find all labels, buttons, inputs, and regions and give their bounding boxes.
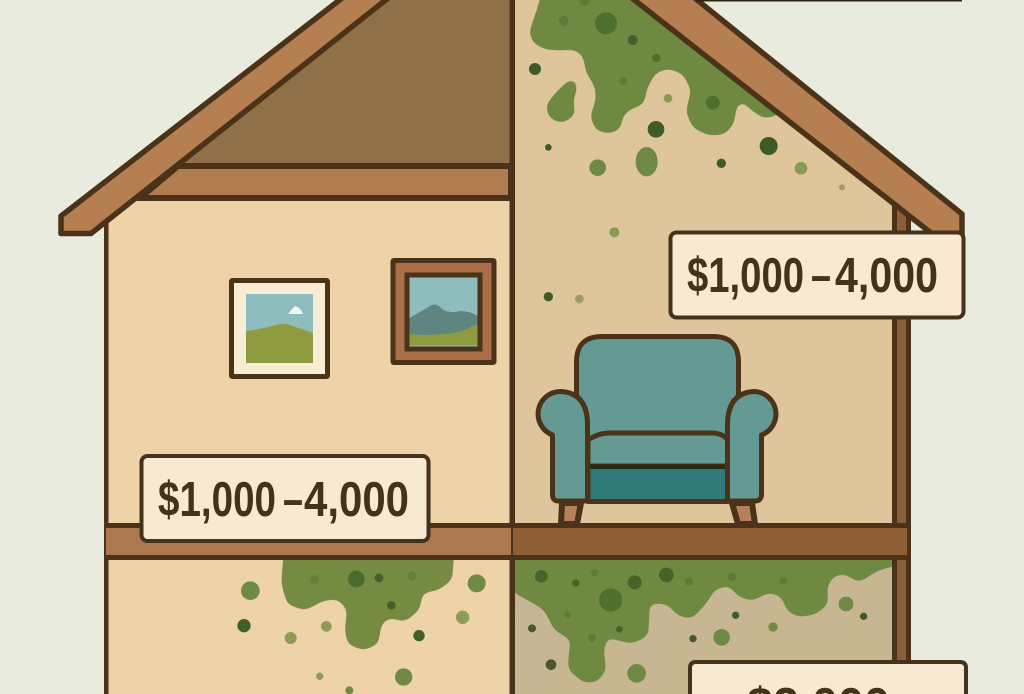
chair seat cushion bbox=[588, 433, 728, 466]
chair leg right bbox=[732, 503, 755, 524]
panel: right upper wall bbox=[513, 0, 895, 525]
price label: right upper: – bbox=[811, 249, 831, 303]
price label: left floor: $1,000 bbox=[158, 473, 276, 527]
panel: left upper wall bbox=[106, 198, 511, 525]
centre divider bbox=[510, 0, 515, 694]
right post bbox=[892, 203, 911, 660]
mold: left basement bbox=[237, 550, 486, 694]
panel: right basement wall bbox=[513, 558, 895, 694]
right roof rafter bbox=[628, 0, 962, 240]
chair leg left bbox=[561, 503, 581, 524]
price label: bottom right bbox=[690, 662, 966, 694]
panel: clean attic bbox=[180, 0, 511, 166]
chair seat shadow line bbox=[589, 464, 727, 469]
chair back bbox=[576, 336, 738, 460]
price label: left floor: – bbox=[283, 473, 303, 527]
panel: left basement wall bbox=[106, 558, 511, 694]
left roof rafter bbox=[61, 0, 392, 234]
price label: right upper bbox=[670, 232, 964, 318]
mold: right basement bbox=[512, 550, 899, 683]
floor beam right bbox=[511, 523, 908, 560]
armchair bbox=[538, 336, 776, 524]
mold: attic bbox=[529, 0, 845, 303]
price label: right upper: 4,000 bbox=[835, 249, 938, 303]
attic tie beam bbox=[140, 166, 511, 198]
price label: left floor bbox=[142, 456, 428, 541]
picture: cream framed landscape bbox=[232, 280, 328, 376]
chair base bbox=[588, 466, 728, 502]
price label: left floor: 4,000 bbox=[304, 473, 409, 527]
chair arm left bbox=[538, 391, 588, 501]
left wall outline bbox=[104, 218, 108, 694]
picture: brown framed mountains bbox=[393, 260, 494, 362]
floor beam left bbox=[106, 523, 511, 560]
price label: right upper: $1,000 bbox=[687, 249, 804, 303]
top label edge bbox=[696, 0, 962, 2]
chair arm right bbox=[728, 392, 776, 501]
